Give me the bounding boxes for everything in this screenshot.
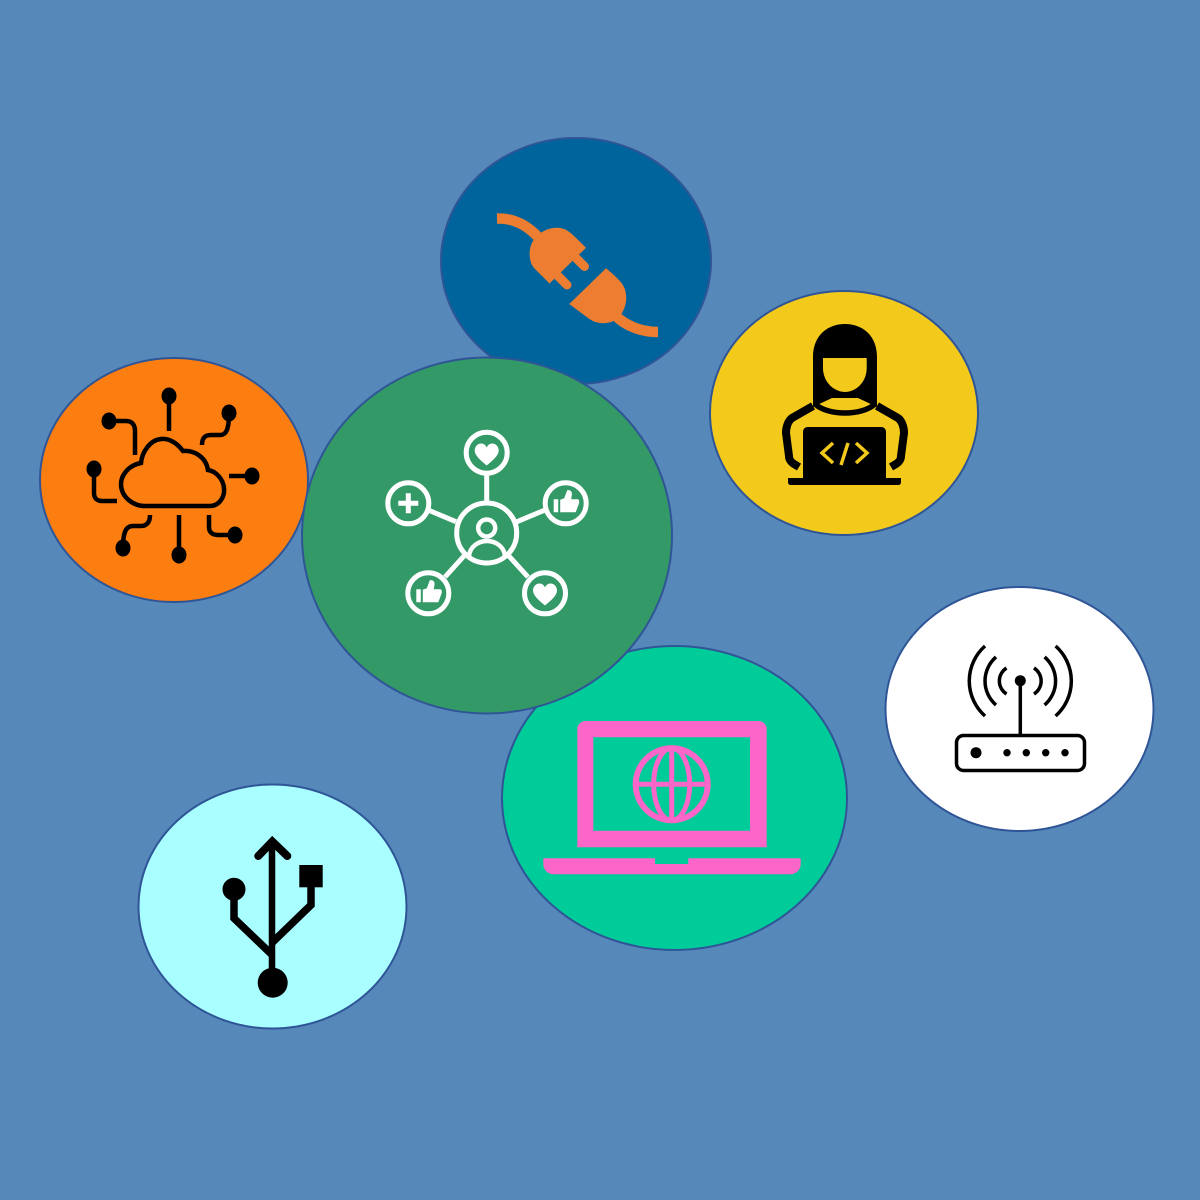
- panel: power plug circle: [441, 138, 711, 384]
- panel: usb circle: [138, 784, 406, 1028]
- panel: internet laptop circle: [502, 646, 847, 950]
- icon: developer at laptop: [786, 324, 904, 485]
- panel: cloud network circle: [40, 358, 308, 602]
- icon: laptop with globe: [543, 721, 801, 874]
- icon: usb symbol: [222, 842, 323, 998]
- panel: wifi router circle: [886, 587, 1154, 831]
- icon: cloud with circuit nodes: [86, 388, 260, 564]
- icon: plug and socket: [497, 218, 658, 332]
- panel: developer circle: [710, 291, 978, 535]
- icon: wifi router: [956, 646, 1084, 770]
- icon: social network hub: [388, 432, 586, 614]
- panel: social network circle: [302, 358, 672, 714]
